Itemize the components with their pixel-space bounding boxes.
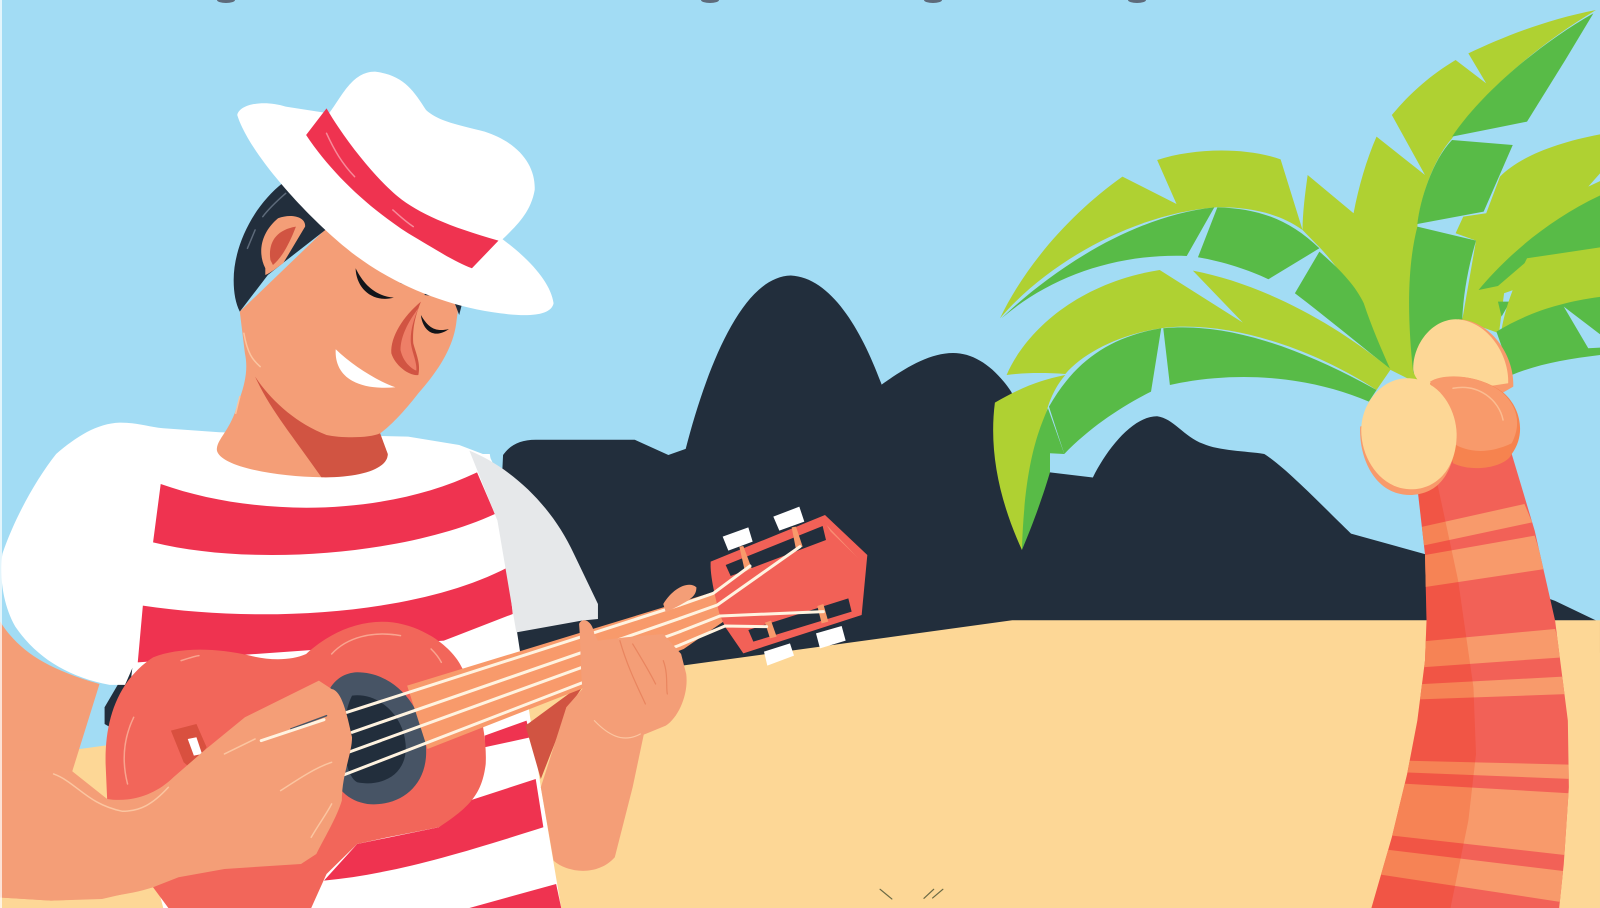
shirt stripe 2 bbox=[138, 567, 513, 662]
tuning pegs bbox=[723, 507, 846, 666]
head strings bbox=[680, 547, 823, 645]
cropped letter bottoms at top edge bbox=[217, 0, 1146, 3]
coconut: front bbox=[1360, 378, 1457, 495]
hair highlight bbox=[247, 193, 286, 248]
nose bbox=[391, 302, 421, 375]
shirt sleeve shadow right bbox=[469, 451, 598, 632]
head slots bbox=[726, 526, 852, 642]
neck shadow bbox=[255, 377, 388, 477]
forearm right and shadow bbox=[526, 681, 644, 871]
smile bbox=[336, 349, 395, 388]
shirt stripe 5 bbox=[469, 884, 561, 908]
mountains bbox=[490, 275, 1600, 735]
hat bbox=[237, 72, 554, 315]
fretting hand bbox=[579, 585, 696, 738]
jaw highlight bbox=[236, 333, 260, 413]
pick string bbox=[291, 716, 327, 729]
strumming hand bbox=[0, 681, 352, 901]
dark shirt back under sleeve bbox=[105, 651, 143, 729]
man bbox=[0, 72, 867, 908]
right eye bbox=[421, 315, 449, 334]
coconut: cap bbox=[1430, 376, 1520, 468]
frond: hanging left bbox=[993, 375, 1065, 550]
hand contour lines bbox=[54, 739, 332, 837]
palm trunk bbox=[1361, 454, 1570, 908]
shirt stripe 1 bbox=[153, 472, 495, 555]
shirt shoulder and left sleeve bbox=[1, 423, 510, 685]
left arm bbox=[0, 617, 153, 901]
bridge bbox=[171, 724, 207, 769]
ukulele body bbox=[106, 592, 730, 908]
shirt torso bbox=[122, 454, 561, 908]
hair bbox=[234, 183, 328, 312]
hat band bbox=[306, 108, 498, 268]
neck and face bbox=[217, 183, 462, 477]
frond: tall centre bbox=[1303, 10, 1596, 383]
ear bbox=[261, 216, 305, 275]
ukulele highlights bbox=[124, 634, 441, 784]
sand bbox=[0, 620, 1600, 908]
left edge strip bbox=[0, 0, 2, 908]
neck bbox=[407, 592, 730, 749]
coconuts bbox=[1360, 319, 1520, 495]
coconut: back bbox=[1413, 319, 1513, 407]
grass marks bbox=[880, 889, 943, 899]
peg posts bbox=[739, 527, 828, 638]
strings bbox=[339, 605, 680, 776]
ukulele headstock bbox=[680, 507, 867, 666]
palm fronds bbox=[993, 10, 1600, 550]
shirt stripe 3 bbox=[485, 721, 531, 747]
left eye bbox=[356, 268, 394, 299]
head highlight bbox=[827, 525, 858, 558]
frond: upper left bbox=[1000, 151, 1390, 369]
shirt stripe 4 bbox=[324, 779, 543, 881]
eyebrows bbox=[352, 247, 462, 315]
hat band highlights bbox=[327, 133, 413, 227]
sound hole bbox=[322, 672, 426, 804]
head plate bbox=[711, 515, 867, 653]
frond: right back bbox=[1456, 132, 1600, 375]
frond: lower left bbox=[1007, 270, 1391, 454]
